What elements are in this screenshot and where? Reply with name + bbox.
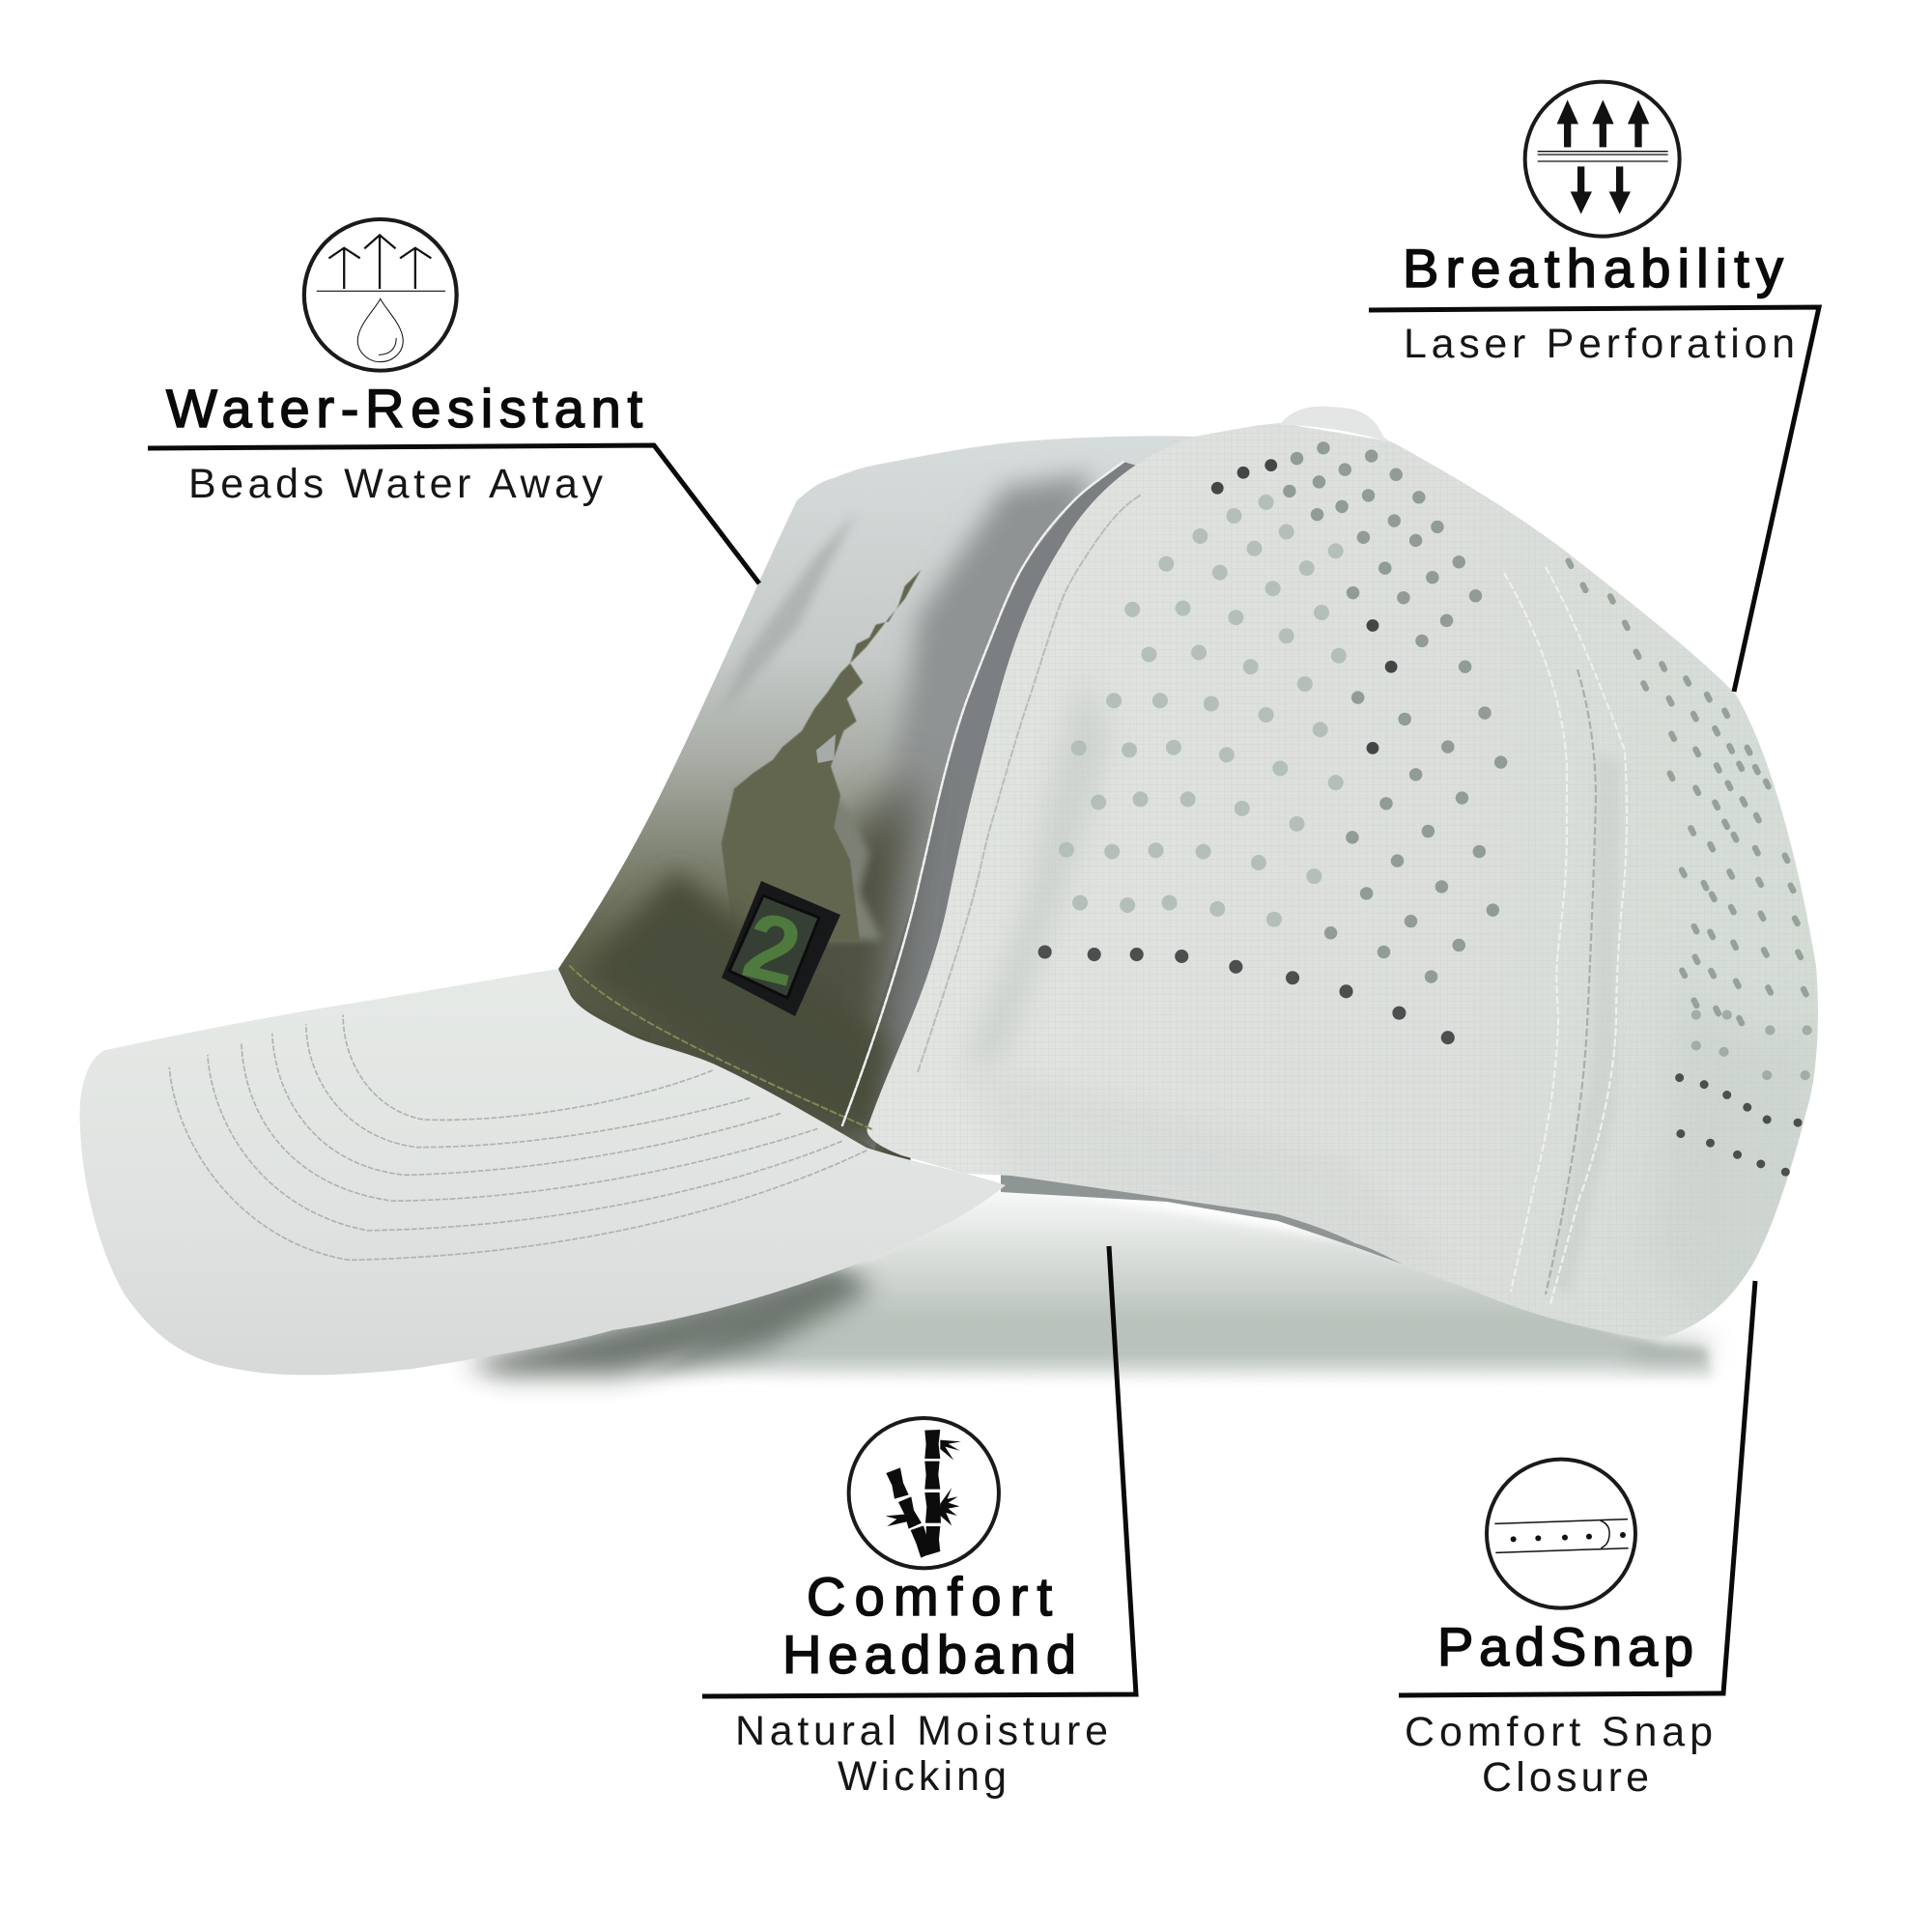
callout: PadSnap bbox=[1399, 1281, 1755, 1801]
logo patch bbox=[722, 881, 840, 1016]
subtext line 2: Closure bbox=[1482, 1754, 1649, 1801]
icon: snap strap bbox=[1487, 1460, 1635, 1608]
callout: Comfort Headband bbox=[702, 1246, 1136, 1800]
icon: breathable arrows through layers bbox=[1525, 82, 1680, 237]
laser perforation holes: side panel bbox=[1045, 448, 1807, 1172]
heading line 2: Headband bbox=[782, 1624, 1076, 1685]
crown side panels bbox=[850, 415, 1826, 1352]
heading: Comfort bbox=[807, 1566, 1052, 1627]
subtext: Natural Moisture bbox=[735, 1708, 1108, 1754]
dark lower print bbox=[814, 767, 937, 1150]
crown button bbox=[1280, 407, 1391, 442]
laser perforation holes: back panel bbox=[1569, 561, 1806, 1023]
back panel seams bbox=[1504, 567, 1627, 1304]
leader line bbox=[1369, 307, 1819, 692]
hat bbox=[79, 407, 1826, 1375]
front printed panel bbox=[558, 436, 1194, 1160]
forest tree print bbox=[722, 570, 921, 940]
callout: Breathability bbox=[1369, 82, 1819, 692]
leader line bbox=[148, 445, 759, 583]
icon: bamboo bbox=[849, 1418, 999, 1568]
leader line bbox=[702, 1246, 1136, 1696]
leader line bbox=[1399, 1281, 1755, 1695]
heading: PadSnap bbox=[1437, 1616, 1693, 1677]
subtext line 2: Wicking bbox=[838, 1753, 1007, 1800]
headband strip bbox=[1001, 1171, 1406, 1265]
dark lower holes row bbox=[1045, 952, 1448, 1037]
subtext: Comfort Snap bbox=[1405, 1709, 1713, 1755]
heading: Breathability bbox=[1403, 238, 1783, 298]
subtext: Beads Water Away bbox=[188, 461, 603, 507]
subtext: Laser Perforation bbox=[1404, 321, 1795, 367]
callout: Water-Resistant bbox=[148, 219, 759, 583]
print streak bbox=[728, 520, 852, 699]
heading: Water-Resistant bbox=[166, 378, 642, 439]
logo patch: 2 bbox=[734, 891, 810, 1007]
front panel stitching bbox=[570, 462, 1140, 1130]
ground shadow bbox=[464, 1184, 1715, 1381]
icon: water drop with arrows bbox=[304, 219, 457, 371]
visor bbox=[79, 969, 1006, 1375]
gray print band bbox=[821, 473, 1092, 1159]
visor stitching bbox=[169, 1015, 867, 1260]
